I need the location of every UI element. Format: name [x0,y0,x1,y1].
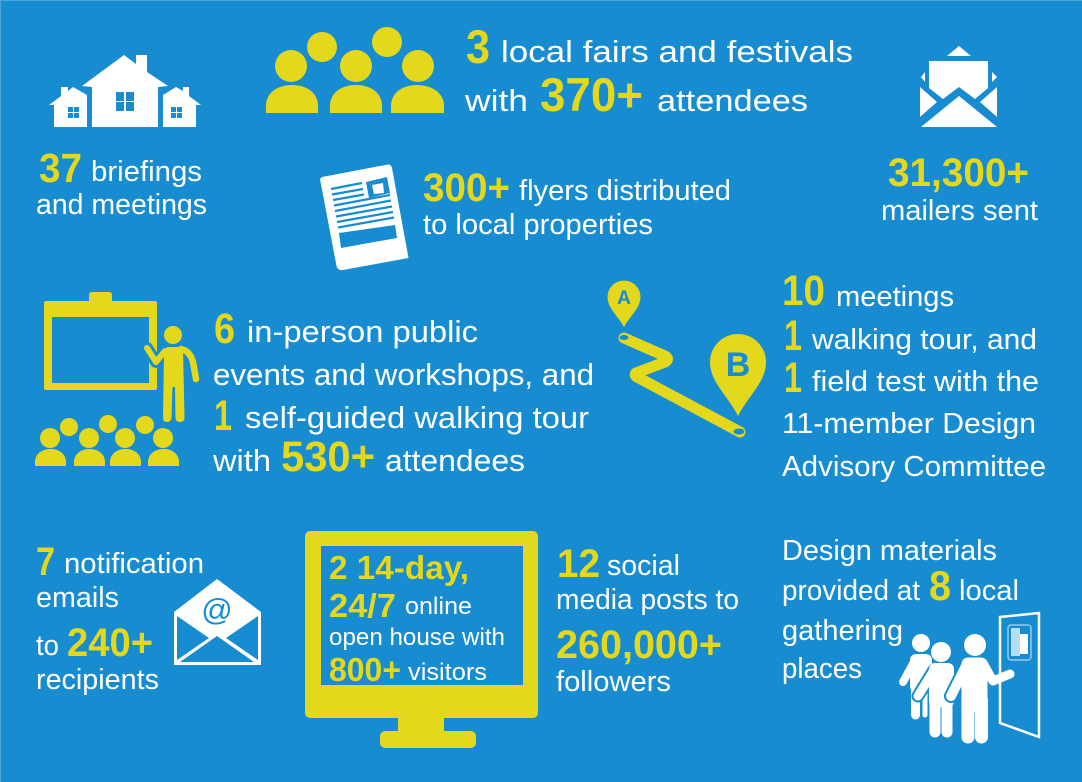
text: Design materials provided at 8 local gathering places: local [959,575,1019,607]
text: 2 14-day, 24/7 online open house with 800+ visitors: 800+ [329,651,401,688]
text: 6 in-person public events and workshops, and 1 self-guided walking tour with 530+ attendees: in-person public [247,314,478,349]
text: 10 meetings, 1 walking tour, 1 field test with the 11-member Design Advisory Committee: 10 [782,267,825,315]
text: 37 briefings and meetings: briefings [91,156,202,188]
text: Design materials provided at 8 local gathering places: provided at [782,575,920,607]
icon: email envelope with at sign: @ [201,592,233,627]
icon: presenter with audience [35,292,196,466]
text: 12 social media posts to 260,000+ followers: followers [556,666,671,698]
text: 6 in-person public events and workshops, and 1 self-guided walking tour with 530+ attendees: self-guided walking tour [245,400,589,435]
text: 7 notification emails to 240+ recipients: emails [36,582,119,614]
text: 10 meetings, 1 walking tour, 1 field test with the 11-member Design Advisory Committee: 1 [784,312,802,360]
text: 300+ flyers distributed to local properties: flyers distributed [519,175,731,207]
text: 37 briefings and meetings: and meetings [36,189,207,221]
icon: houses [49,55,201,127]
text: 6 in-person public events and workshops, and 1 self-guided walking tour with 530+ attendees: attendees [385,443,525,478]
text: 6 in-person public events and workshops, and 1 self-guided walking tour with 530+ attendees: events and workshops, and [213,357,594,392]
icon: route from A to B: B [726,346,750,384]
text: 3 local fairs and festivals with 370+ attendees: 3 [466,20,490,73]
text: 6 in-person public events and workshops, and 1 self-guided walking tour with 530+ attendees: 6 [214,305,235,353]
text: Design materials provided at 8 local gathering places: gathering [782,615,903,647]
icon: email envelope with at sign [174,579,261,665]
text: 3 local fairs and festivals with 370+ attendees: attendees [657,83,808,118]
text: 12 social media posts to 260,000+ followers [556,542,739,698]
text: 37 briefings and meetings: 37 [39,145,82,191]
text: 31,300+ mailers sent [881,151,1038,227]
text: 7 notification emails to 240+ recipients: 7 [36,540,55,584]
text: 7 notification emails to 240+ recipients: 240+ [67,621,153,665]
text: 31,300+ mailers sent: 31,300+ [888,151,1029,195]
text: Design materials provided at 8 local gathering places: 8 [929,562,951,609]
text: 6 in-person public events and workshops, and 1 self-guided walking tour with 530+ attendees: 530+ [281,433,375,481]
text: 7 notification emails to 240+ recipients: to [36,630,59,662]
icon: people at door with poster [903,613,1039,737]
text: 6 in-person public events and workshops, and 1 self-guided walking tour with 530+ attendees: with [212,443,271,478]
text: Design materials provided at 8 local gathering places: Design materials [782,535,997,567]
text: Design materials provided at 8 local gathering places: places [782,653,862,685]
text: 2 14-day, 24/7 online open house with 800+ visitors: open house with [329,624,505,651]
text: 37 briefings and meetings [36,145,207,221]
text: 12 social media posts to 260,000+ followers: social [607,550,680,582]
text: 12 social media posts to 260,000+ followers: media posts to [556,584,739,616]
text: 2 14-day, 24/7 online open house with 800+ visitors: 24/7 [329,587,396,624]
icon: monitor [305,531,538,748]
text: 10 meetings, 1 walking tour, 1 field test with the 11-member Design Advisory Committee: 11-member Design [782,408,1036,440]
text: Design materials provided at 8 local gathering places [782,535,1019,685]
text: 2 14-day, 24/7 online open house with 800+ visitors: 2 14-day, [329,549,469,586]
text: 7 notification emails to 240+ recipients: recipients [36,664,159,696]
text: 10 meetings, 1 walking tour, 1 field test with the 11-member Design Advisory Committee [782,267,1046,483]
text: 2 14-day, 24/7 online open house with 800+ visitors: online [405,593,472,620]
icon: open envelope mailer [920,46,997,127]
text: 3 local fairs and festivals with 370+ attendees [464,20,853,121]
text: 2 14-day, 24/7 online open house with 800+ visitors: visitors [408,659,487,686]
text: 300+ flyers distributed to local properties: 300+ [423,166,510,210]
icon: flyer [320,164,408,270]
text: 7 notification emails to 240+ recipients [36,540,204,696]
text: 6 in-person public events and workshops, and 1 self-guided walking tour with 530+ attendees: 1 [214,392,232,440]
text: 12 social media posts to 260,000+ followers: 260,000+ [556,623,722,667]
text: 3 local fairs and festivals with 370+ attendees: local fairs and festivals [501,34,853,69]
text: 300+ flyers distributed to local properties: to local properties [423,209,653,241]
text: 7 notification emails to 240+ recipients: notification [64,548,204,580]
icon: route from A to B [608,280,766,434]
text: 10 meetings, 1 walking tour, 1 field test with the 11-member Design Advisory Committee: 1 [784,354,802,402]
text: 10 meetings, 1 walking tour, 1 field test with the 11-member Design Advisory Committee: meetings [836,281,954,313]
text: 3 local fairs and festivals with 370+ attendees: 370+ [540,68,643,121]
text: 6 in-person public events and workshops, and 1 self-guided walking tour with 530+ attendees [212,305,594,481]
text: 10 meetings, 1 walking tour, 1 field test with the 11-member Design Advisory Committee: Advisory Committee [782,451,1046,483]
icon: crowd of people [266,27,444,113]
text: 12 social media posts to 260,000+ followers: 12 [557,542,600,586]
text: 300+ flyers distributed to local properties [423,166,731,241]
text: 10 meetings, 1 walking tour, 1 field test with the 11-member Design Advisory Committee: field test with the [812,366,1039,398]
text: 3 local fairs and festivals with 370+ attendees: with [464,83,528,118]
text: 2 14-day, 24/7 online open house with 800+ visitors [329,549,505,688]
icon: route from A to B: A [617,288,631,309]
text: 10 meetings, 1 walking tour, 1 field test with the 11-member Design Advisory Committee: walking tour, and [811,324,1037,356]
text: 31,300+ mailers sent: mailers sent [881,195,1038,227]
